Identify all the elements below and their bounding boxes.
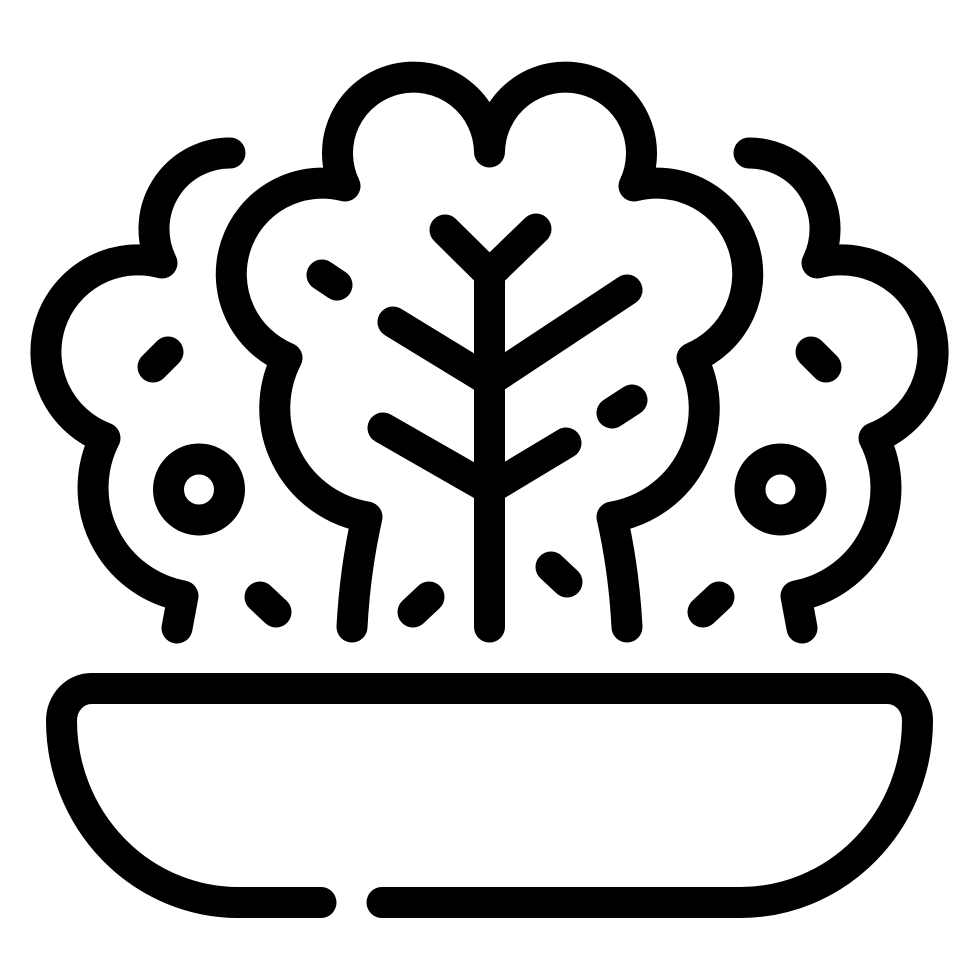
leaf speckles (153, 275, 826, 612)
central lettuce leaf outline (231, 77, 748, 627)
left lettuce leaf outline (46, 153, 230, 628)
left ring (168, 459, 230, 520)
bowl (62, 688, 918, 902)
right ring (750, 459, 811, 520)
right lettuce leaf outline (749, 153, 933, 628)
central leaf veins (383, 229, 627, 627)
